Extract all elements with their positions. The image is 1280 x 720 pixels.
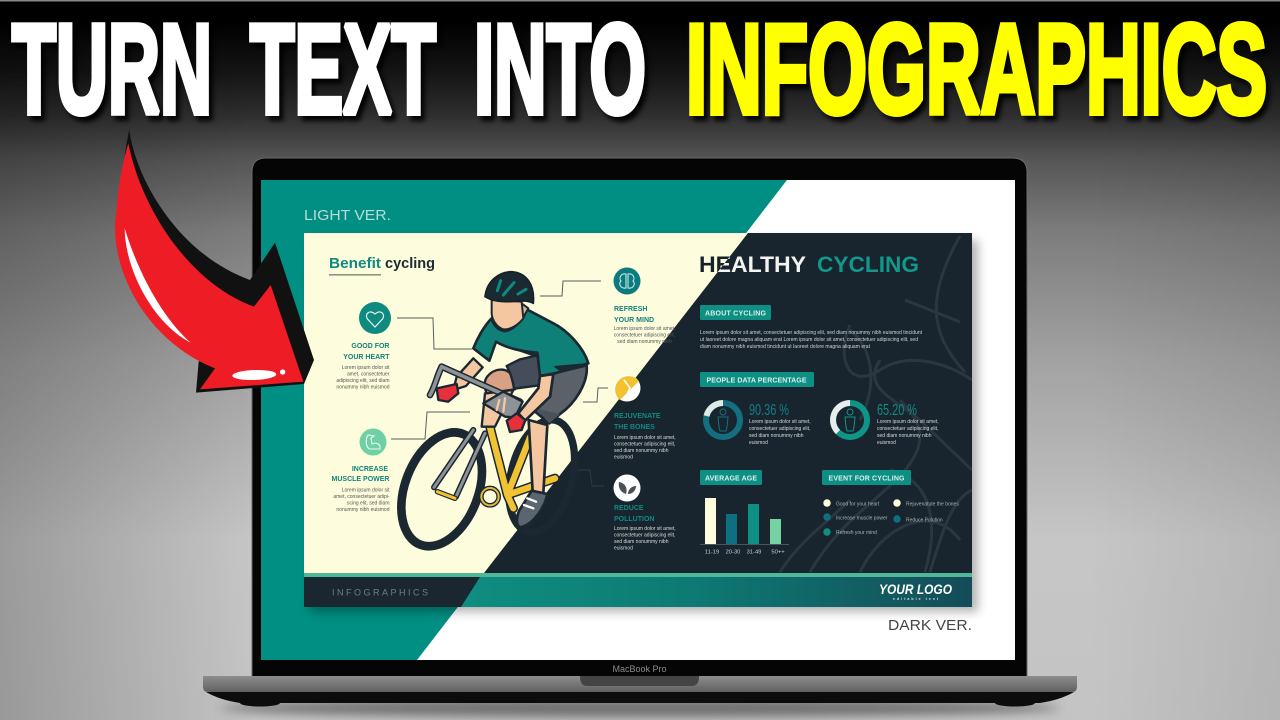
headline white words: INTO [474,0,646,140]
main title: healthy cycling: HEALTHY [699,252,806,277]
benefit: good for your heart [336,302,391,390]
benefit: good for your heart: YOUR HEART [343,354,390,361]
handlebar stem [483,392,523,417]
section: average age bar chart: 31-49 [747,550,761,556]
neck [519,302,528,318]
headline white words: TURN [12,0,212,140]
section: people data percentage [700,372,939,446]
benefit: increase muscle power [332,428,390,513]
section: about cycling: diam nonummy nibh euismod tincidunt ut laoreet dolore magna aliquam erat [700,344,871,350]
main title: healthy cycling [700,256,918,272]
logo: YOUR LOGO [879,581,952,597]
benefit: reduce pollution: sed diam nonummy nibh [614,539,669,545]
bezel label: MacBook Pro [612,664,667,674]
benefit: increase muscle power: Lorem ipsum dolor sit [342,488,390,494]
section: event for cycling legend: Reduce Polution [906,518,943,524]
headline shadow: TEXT [254,3,440,145]
benefit: good for your heart: GOOD FOR [351,343,390,350]
section: average age bar chart [700,470,789,556]
donut: 90.36 percent [706,402,811,446]
footer band: INFOGRAPHICS [332,588,428,598]
background map lines [780,236,972,572]
jersey [473,309,588,376]
benefit: reduce pollution: consectetuer adipiscing elit, [614,532,675,538]
donut: 65.20 percent: euismod [877,440,896,446]
heading: benefit cycling: cycling [385,255,435,272]
benefit: refresh your mind: YOUR MIND [614,317,654,324]
laptop base [203,676,1077,692]
front wheel [386,421,497,558]
laptop lid [252,158,1027,677]
arrow body [115,143,303,389]
infographic card [304,233,978,612]
donut: 90.36 percent: 90.36 % [749,402,789,419]
benefit: increase muscle power: MUSCLE POWER [332,476,390,483]
rear wheel [498,413,585,539]
upper body [430,272,588,432]
light version label: LIGHT VER. [304,207,391,224]
benefit: good for your heart: Lorem ipsum dolor sit [342,365,390,371]
section: about cycling: Lorem ipsum dolor sit amet, consectetuer adipiscing elit, sed diam nonummy nibh euismod tincidunt [700,330,923,336]
main title: healthy cycling: HEALTHY [699,252,806,277]
far shorts [507,355,540,389]
section: event for cycling legend: Increase muscle power [836,516,888,522]
benefit: increase muscle power: INCREASE [352,466,388,473]
cyclist illustration [386,272,588,558]
arrow shadow [122,129,314,393]
icon: heart [359,302,391,334]
headline shadow [16,3,1271,145]
benefit: refresh your mind: Lorem ipsum dolor sit amet, [614,326,675,332]
arrow highlight [125,228,191,343]
donut: 65.20 percent: 65.20 % [877,402,917,419]
section: event for cycling legend: Refresh your mind [836,530,877,536]
icon: muscle [360,428,386,456]
heading: benefit cycling: Benefit [329,255,381,272]
bike frame [434,417,555,508]
section: event for cycling legend: EVENT FOR CYCLING [828,476,905,482]
section: event for cycling legend [822,470,959,536]
section: average age bar chart: AVERAGE AGE [705,476,757,482]
laptop shadow [220,699,1060,717]
benefit: rejuvenate the bones: euismod [614,454,633,460]
fork [434,430,485,497]
helmet [485,272,534,303]
benefit: rejuvenate the bones: consectetuer adipiscing elit, [614,442,675,448]
benefit: rejuvenate the bones: REJUVENATE [614,413,661,420]
icon: leaves [614,474,640,502]
donut: 90.36 percent: consectetuer adipiscing elit, [749,426,810,432]
face [492,300,523,329]
benefit: good for your heart: amet, consectetuer [347,372,390,378]
headline white words: TEXT [250,0,436,140]
laptop notch [580,676,699,686]
icon: bones [614,374,640,402]
logo: editable text [893,597,939,601]
headline shadow: INTO [478,3,650,145]
benefit: increase muscle power: nonummy nibh euismod [336,507,390,513]
benefit: reduce pollution: POLLUTION [614,516,654,523]
dark version label: DARK VER. [888,617,972,634]
far glove [437,384,458,402]
jersey shadow [517,350,587,370]
donut: 65.20 percent: sed diam nonummy nibh [877,433,932,439]
benefit: refresh your mind: consectetuer adipiscing elit, [614,332,675,338]
near leg [529,420,547,493]
donut: 90.36 percent: euismod [749,440,768,446]
benefit: reduce pollution: REDUCE [614,505,644,512]
benefit: reduce pollution [614,474,676,552]
screen [261,180,1015,660]
benefit: increase muscle power: scing elit, sed diam [347,500,390,506]
donut: 65.20 percent [833,402,939,446]
headline [12,0,1271,145]
laptop [203,158,1077,717]
section: about cycling: ut laoreet dolore magna aliquam erat Lorem ipsum dolor sit amet, consectetuer adipiscing elit, sed [700,337,918,343]
laptop feet [240,700,1035,706]
section: average age bar chart: 11-19 [705,550,719,556]
benefit: refresh your mind: REFRESH [614,306,647,313]
icon: brain [614,268,640,294]
footer band [304,573,972,607]
benefit: refresh your mind: sed diam nonummy nibh [617,339,672,345]
shoe [517,491,547,527]
benefit: rejuvenate the bones: Lorem ipsum dolor sit amet, [614,435,676,441]
near arm [518,374,553,421]
headline shadow: TURN [16,3,216,145]
arrow gloss [232,369,276,381]
section: about cycling: ABOUT CYCLING [705,310,767,318]
section: average age bar chart: 20-30 [726,550,740,556]
section: people data percentage: PEOPLE DATA PERCENTAGE [706,378,807,384]
handlebar [430,367,520,402]
connector lines [391,281,608,486]
far arm [453,358,483,390]
section: average age bar chart: 50++ [771,550,785,556]
donut: 65.20 percent: Lorem ipsum dolor sit amet, [877,419,939,425]
headline white words [12,0,646,140]
benefit: good for your heart: adipiscing elit, sed diam [336,378,390,384]
section: about cycling [700,305,923,350]
far lower leg [482,390,513,427]
red arrow [115,129,314,393]
heading: benefit cycling [329,255,435,275]
benefit: rejuvenate the bones: sed diam nonummy nibh [614,448,669,454]
benefit: reduce pollution: euismod [614,546,633,552]
main title: healthy cycling: CYCLING [817,252,919,277]
section: event for cycling legend: Good for your heart [836,502,880,508]
benefit: rejuvenate the bones [614,374,676,460]
laptop underside [206,692,1074,703]
near glove [507,413,525,432]
donut: 90.36 percent: Lorem ipsum dolor sit amet, [749,419,811,425]
benefit: rejuvenate the bones: THE BONES [614,424,655,431]
section: event for cycling legend: Rejuvenatute the bones [906,502,959,508]
far thigh and knee [485,370,515,393]
benefit: reduce pollution: Lorem ipsum dolor sit amet, [614,526,676,532]
benefit: good for your heart: nonummy nibh euismod [336,384,390,390]
donut: 90.36 percent: sed diam nonummy nibh [749,433,804,439]
benefit: refresh your mind [614,268,675,345]
near shorts [534,365,587,423]
donut: 65.20 percent: consectetuer adipiscing elit, [877,426,938,432]
benefit: increase muscle power: amet, consectetuer adipi- [333,494,390,500]
